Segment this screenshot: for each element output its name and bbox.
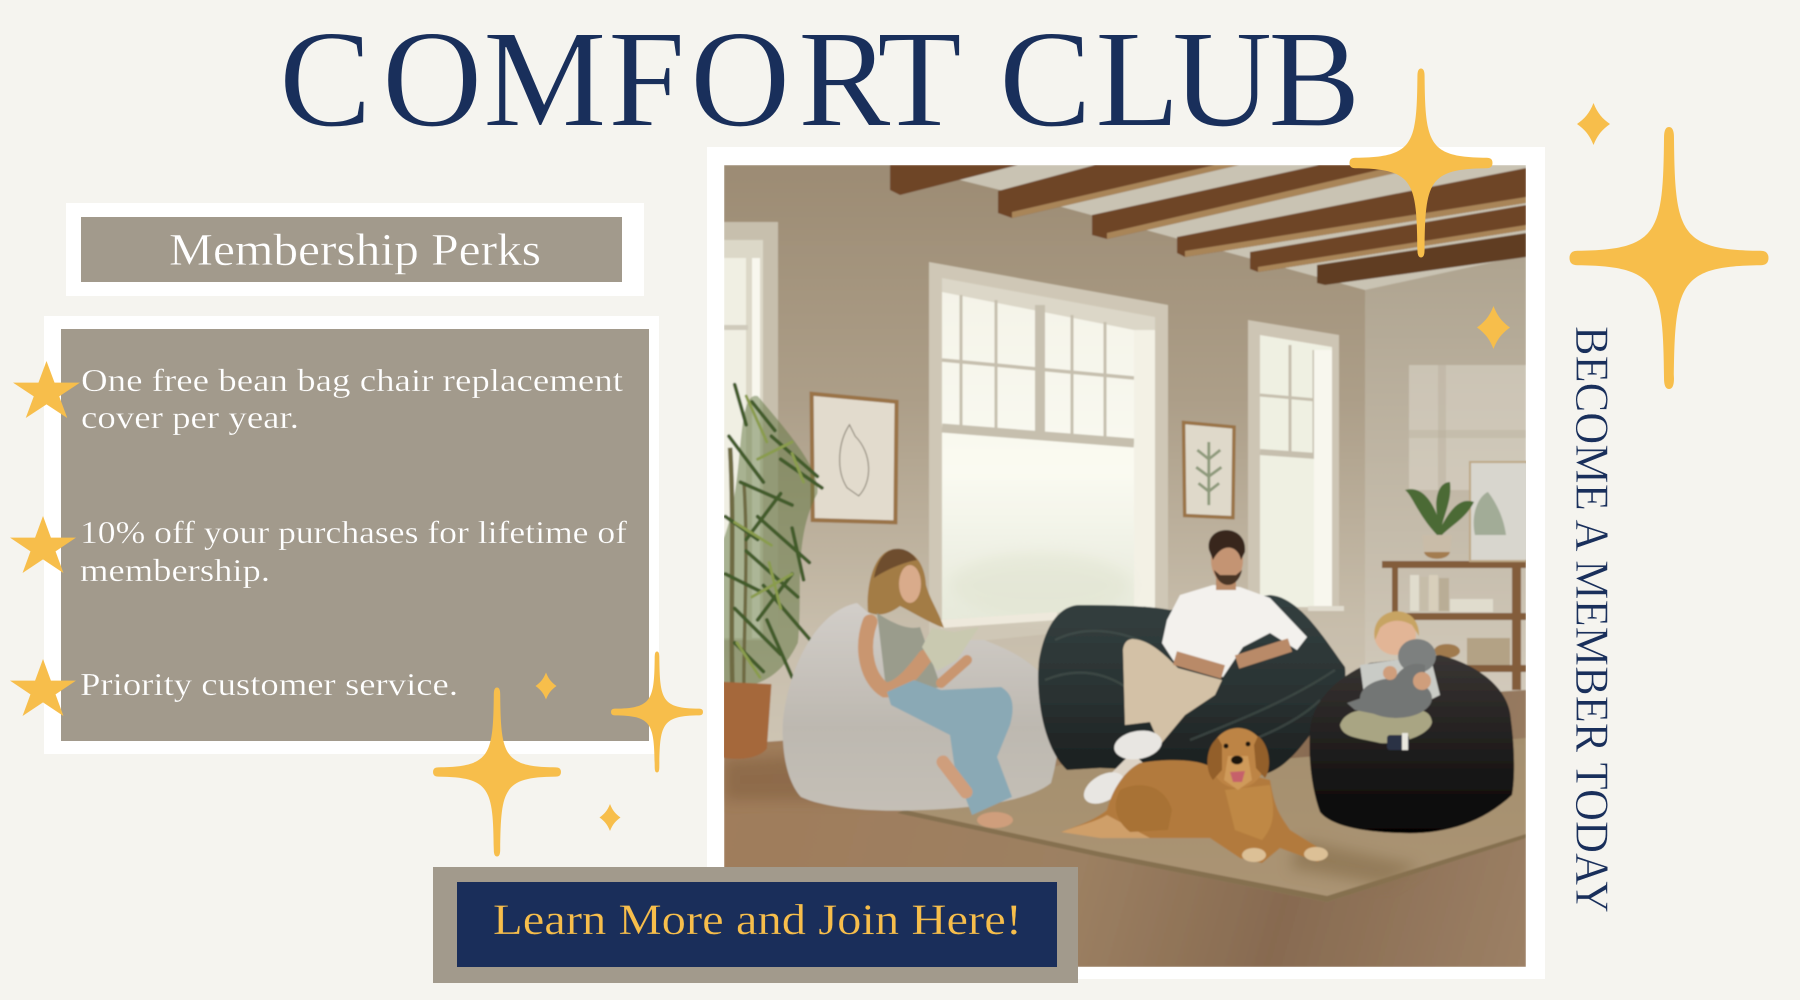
beam light edges (1012, 165, 1526, 272)
right window (1248, 320, 1339, 610)
icon: small sparkle in perks panel (536, 672, 556, 700)
black bean bag (1309, 655, 1514, 833)
picture leaning on shelf (1470, 462, 1530, 561)
perk 2 text: membership. (80, 552, 270, 588)
wall art and left plant (723, 385, 1234, 759)
icon: small sparkle top right (1577, 103, 1610, 145)
wall (724, 165, 1366, 742)
vertical call to action text: BECOME A MEMBER TODAY (1565, 326, 1618, 913)
plant pot (723, 682, 771, 759)
perk 2 text (80, 514, 627, 588)
perk 2 text: 10% off your purchases for lifetime of (80, 514, 627, 550)
icon: large sparkle by perks panel (433, 688, 561, 856)
white bean bag (783, 603, 1059, 811)
ceiling (900, 165, 1526, 290)
icon: sparkle top of photo (1350, 68, 1492, 257)
left window (724, 221, 779, 528)
wall picture 1 (812, 394, 897, 522)
call to action button (433, 867, 1078, 983)
icon: small sparkle below perks panel (600, 804, 620, 831)
woman reading (866, 549, 1013, 828)
beams (890, 165, 1526, 285)
icon: star bullet 2 (10, 516, 76, 573)
icon: small sparkle on photo (1477, 306, 1510, 349)
shelf plant (1405, 482, 1506, 559)
icon: medium sparkle by perks panel (611, 652, 703, 772)
photo: family on bean bags in living room (723, 165, 1530, 967)
perk 1 text (81, 362, 623, 435)
right wall (1364, 256, 1526, 692)
man sitting (1078, 530, 1307, 810)
perk 1 text: cover per year. (81, 399, 299, 435)
panel: perks list (44, 316, 659, 754)
panel: membership perks heading (66, 203, 644, 296)
photo frame (707, 147, 1545, 979)
title: COMFORT CLUB (279, 2, 1361, 156)
floor (724, 690, 1526, 967)
icon: star bullet 3 (10, 659, 76, 716)
icon: star bullet 1 (13, 361, 80, 418)
heading text: Membership Perks (169, 225, 541, 275)
rug (897, 738, 1526, 902)
icon: large sparkle right (1570, 127, 1768, 389)
centre window (929, 262, 1168, 646)
perk 3 text: Priority customer service. (80, 666, 458, 702)
centre window garden haze (966, 558, 1116, 590)
golden retriever (1061, 728, 1328, 863)
child with toy (1340, 611, 1440, 750)
perk 1 text: One free bean bag chair replacement (81, 362, 623, 398)
button label: Learn More and Join Here! (493, 897, 1022, 944)
bookshelf (1381, 560, 1526, 691)
wall picture 2 (1184, 422, 1234, 518)
bamboo plant (723, 385, 822, 689)
dark green bean bag (1038, 595, 1345, 775)
